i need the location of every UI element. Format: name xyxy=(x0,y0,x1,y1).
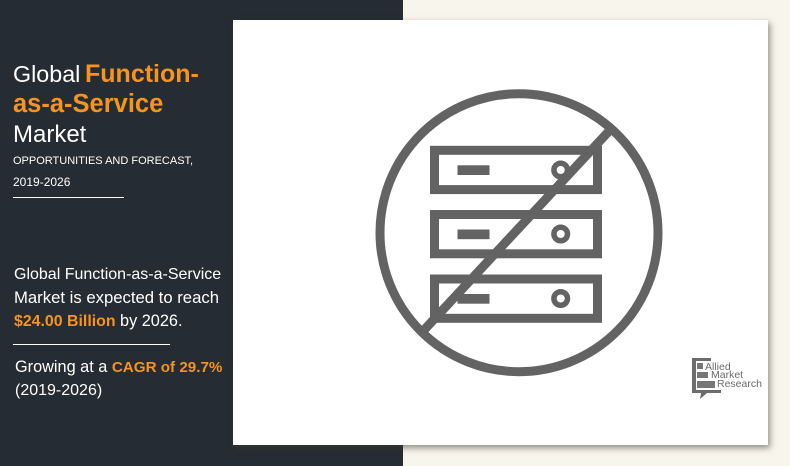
text block: CAGR xyxy=(15,358,222,399)
text block: CAGR: Growing at a CAGR of 29.7% xyxy=(15,358,222,376)
panel: dark left background xyxy=(0,0,403,466)
subtitle: 2019-2026 xyxy=(13,175,70,189)
subtitle xyxy=(13,155,193,189)
text block: CAGR: (2019-2026) xyxy=(15,382,102,399)
logo: Allied Market Research: Market xyxy=(711,368,743,380)
panel: white card xyxy=(233,20,768,445)
logo: Allied Market Research: Allied xyxy=(705,360,731,372)
icon: crossed-out server racks xyxy=(376,89,662,376)
subtitle: OPPORTUNITIES AND FORECAST, xyxy=(13,155,193,167)
title: Global Function- xyxy=(13,60,199,88)
text block: market size xyxy=(14,266,221,330)
text block: market size: $24.00 Billion by 2026. xyxy=(14,312,182,330)
text block: market size: Market is expected to reach xyxy=(14,288,219,307)
logo: Allied Market Research xyxy=(692,358,762,399)
title: as-a-Service xyxy=(13,90,163,118)
title xyxy=(13,60,199,148)
logo: Allied Market Research: Research xyxy=(717,378,762,390)
title: Market xyxy=(13,121,86,148)
text block: market size: Global Function-as-a-Service xyxy=(14,266,221,283)
